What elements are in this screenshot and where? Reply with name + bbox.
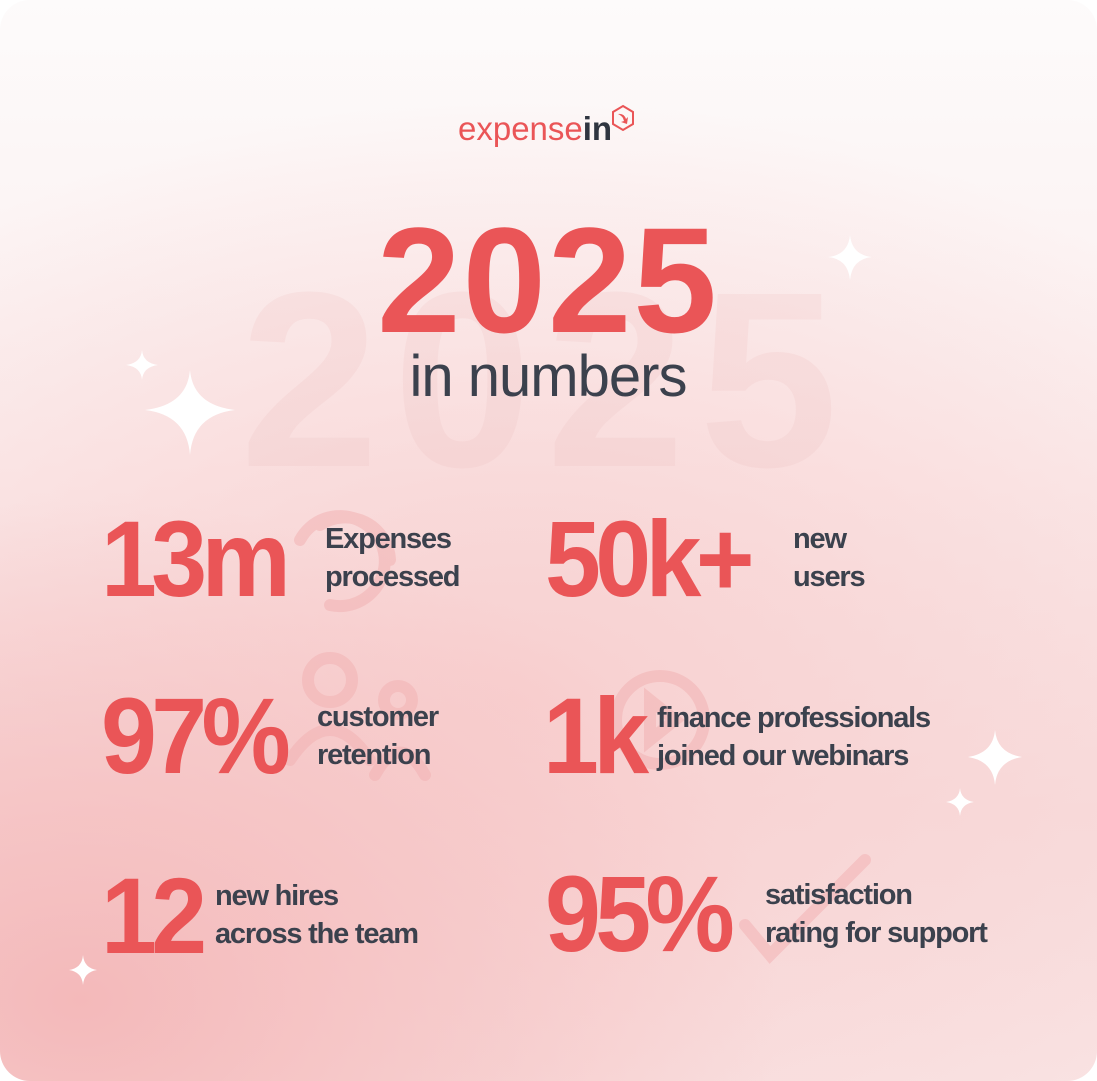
text: processed [325,561,459,593]
stat: 50k+ [545,498,864,619]
text: customer [317,701,438,733]
logo: expensein [458,110,612,147]
stat: 95% [545,853,988,974]
text: 13m [101,498,285,619]
text: retention [317,739,430,771]
stat: 97% [101,675,439,796]
text: Expenses [325,523,451,555]
text: across the team [215,918,418,950]
icon: logo hexagon [612,104,634,132]
text: 50k+ [545,498,749,619]
text: new [793,523,846,555]
text: joined our webinars [657,740,908,772]
title: 2025 [377,196,719,364]
title: in numbers [410,344,686,409]
stat: 13m [101,498,459,619]
stat: 1k [543,675,930,796]
text: rating for support [765,917,987,949]
text: 97% [101,675,285,796]
text: 95% [545,853,729,974]
text: satisfaction [765,879,912,911]
text: finance professionals [657,702,930,734]
text: users [793,561,864,593]
watermark 2025: 2025 [240,240,852,519]
text: 1k [543,675,644,796]
stat: 12 [101,855,418,976]
text: 12 [101,855,202,976]
text: new hires [215,880,338,912]
